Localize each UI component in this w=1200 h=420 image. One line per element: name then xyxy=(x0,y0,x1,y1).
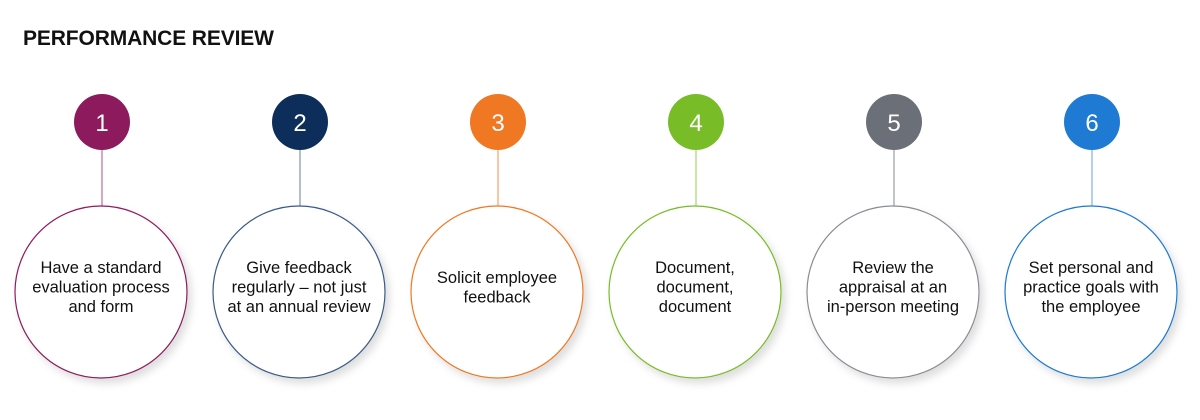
step 2: Give feedback xyxy=(246,259,352,277)
step 3: feedback xyxy=(464,288,531,306)
title: PERFORMANCE REVIEW xyxy=(23,27,274,50)
step 4: 4 xyxy=(689,110,703,137)
step 1: 1 xyxy=(95,110,109,137)
step 5: 5 xyxy=(887,110,901,137)
step 5: appraisal at an xyxy=(839,278,947,296)
step 4 xyxy=(609,94,781,378)
step 1: evaluation process xyxy=(32,278,170,296)
step 5: Review the xyxy=(852,259,934,277)
step 3 xyxy=(411,94,583,378)
step 6 xyxy=(1005,94,1177,378)
step 1 xyxy=(15,94,187,378)
step 2: regularly – not just xyxy=(232,278,367,296)
step 1: Have a standard xyxy=(40,259,162,277)
step 1: and form xyxy=(68,298,134,316)
step 6: 6 xyxy=(1085,110,1099,137)
step 3: 3 xyxy=(491,110,505,137)
step 4: document, xyxy=(656,278,734,296)
step 2: 2 xyxy=(293,110,307,137)
step 2 xyxy=(213,94,385,378)
step 5: in-person meeting xyxy=(827,298,959,316)
step 6: Set personal and xyxy=(1029,259,1153,277)
step 3: Solicit employee xyxy=(437,269,557,287)
step 4: document xyxy=(659,298,732,316)
step 6: the employee xyxy=(1041,298,1141,316)
step 4: Document, xyxy=(655,259,735,277)
step 5 xyxy=(807,94,979,378)
step 6: practice goals with xyxy=(1023,278,1159,296)
step 2: at an annual review xyxy=(227,298,371,316)
